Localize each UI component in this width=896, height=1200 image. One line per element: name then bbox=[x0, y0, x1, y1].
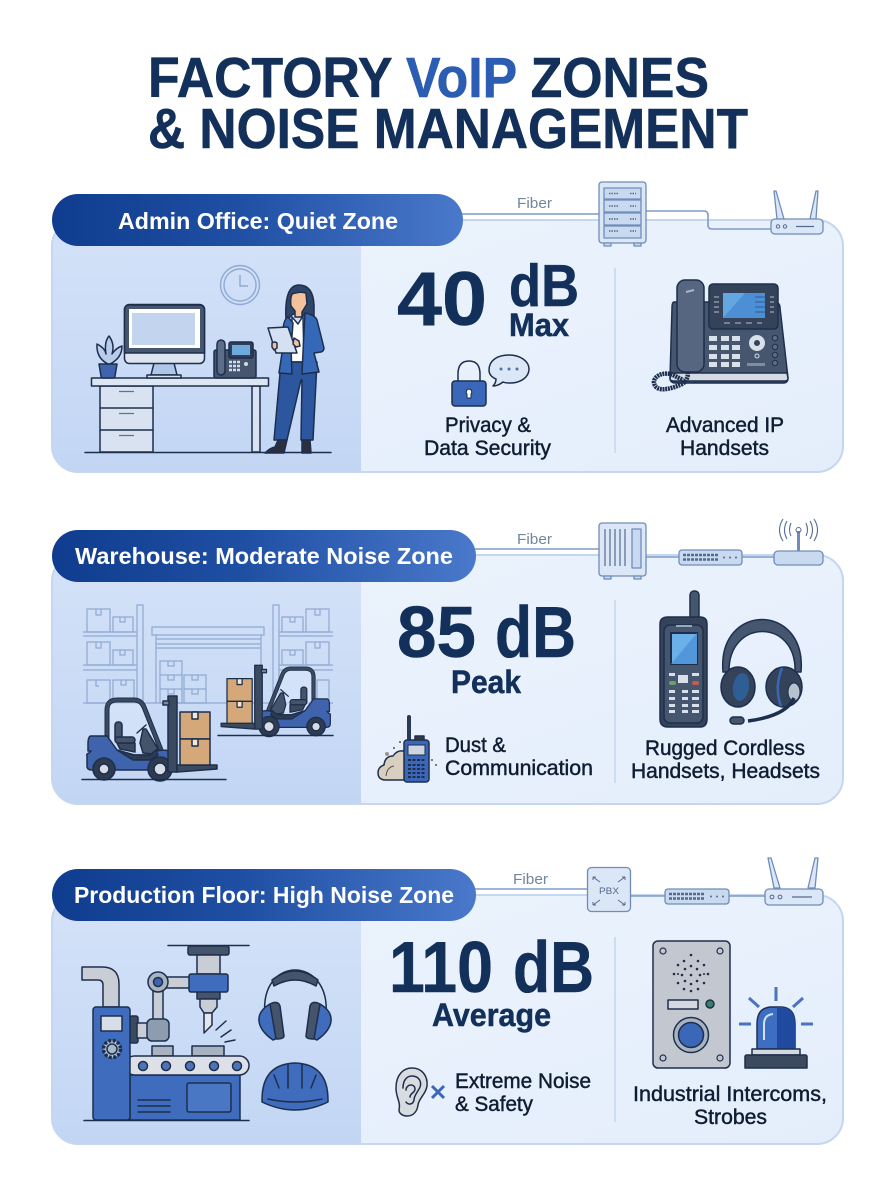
illustration: office desk and woman bbox=[85, 266, 331, 453]
header pill bbox=[52, 869, 476, 921]
plant bbox=[97, 336, 122, 378]
panel background bbox=[52, 220, 843, 472]
label: rugged cordless handsets, headsets bbox=[631, 737, 820, 783]
header pill: Admin Office: Quiet Zone bbox=[118, 208, 398, 234]
woman bbox=[265, 285, 324, 453]
pipe bbox=[82, 967, 119, 1007]
label: dust and communication bbox=[445, 734, 593, 780]
conveyor and base bbox=[125, 1046, 249, 1120]
label: dust and communication: Communication bbox=[445, 757, 593, 780]
title: & NOISE MANAGEMENT bbox=[148, 97, 748, 161]
stat: 40 dB max: dB bbox=[509, 253, 579, 319]
stat: 85 dB peak: Peak bbox=[451, 664, 521, 700]
label: rugged cordless handsets, headsets: Handsets, Headsets bbox=[631, 760, 820, 783]
label: rugged cordless handsets, headsets: Rugged Cordless bbox=[645, 737, 805, 760]
network: fiber line, server and router bbox=[460, 182, 823, 246]
label: industrial intercoms, strobes: Strobes bbox=[694, 1106, 767, 1129]
warehouse shelving and door bbox=[83, 605, 333, 703]
network: fiber line, server, switch and access point: Fiber bbox=[517, 531, 552, 548]
label: extreme noise and safety bbox=[455, 1070, 591, 1116]
panel background bbox=[52, 895, 843, 1144]
control cabinet bbox=[93, 1007, 130, 1120]
stat: 40 dB max: Max bbox=[509, 307, 569, 343]
label: extreme noise and safety: Extreme Noise bbox=[455, 1070, 591, 1093]
network: fiber line, server and router: Fiber bbox=[517, 195, 552, 212]
illustration: factory machine bbox=[82, 946, 331, 1120]
stat: 40 dB max bbox=[397, 253, 579, 343]
stat: 110 dB average: 110 bbox=[389, 928, 493, 1008]
label: privacy and data security: Privacy & bbox=[445, 414, 531, 437]
icon: wall clock bbox=[220, 266, 260, 304]
network: fiber line, PBX, switch and router: PBX bbox=[599, 886, 620, 897]
stat: 110 dB average bbox=[389, 928, 594, 1033]
title: FACTORY VoIP ZONES bbox=[148, 46, 709, 110]
icon: ear defenders bbox=[259, 970, 331, 1040]
header pill: Warehouse: Moderate Noise Zone bbox=[75, 543, 453, 569]
label: privacy and data security: Data Security bbox=[424, 437, 551, 460]
illustration: warehouse with forklifts bbox=[82, 605, 333, 781]
label: advanced IP handsets: Advanced IP bbox=[666, 414, 784, 437]
label: industrial intercoms, strobes: Industrial Intercoms, bbox=[633, 1083, 827, 1106]
label: dust and communication: Dust & bbox=[445, 734, 506, 757]
panel: production floor bbox=[52, 858, 843, 1144]
label: advanced IP handsets: Handsets bbox=[680, 437, 769, 460]
stat: 40 dB max: 40 bbox=[397, 257, 487, 342]
icon: padlock and speech bubble bbox=[452, 355, 529, 406]
forklift: front bbox=[82, 696, 226, 781]
icon: industrial intercom bbox=[653, 941, 730, 1068]
label: industrial intercoms, strobes bbox=[633, 1083, 827, 1129]
stat: 85 dB peak: 85 bbox=[397, 593, 476, 673]
stat: 110 dB average: Average bbox=[432, 997, 551, 1033]
forklift: rear bbox=[218, 665, 333, 737]
label: extreme noise and safety: & Safety bbox=[455, 1093, 533, 1116]
label: privacy and data security bbox=[424, 414, 551, 460]
network: fiber line, PBX, switch and router: Fiber bbox=[513, 871, 548, 888]
stat: 85 dB peak: dB bbox=[495, 593, 576, 673]
header pill bbox=[52, 530, 476, 582]
icon: ear with cross bbox=[396, 1068, 444, 1116]
monitor bbox=[124, 304, 204, 378]
icon: hard hat bbox=[262, 1063, 328, 1110]
stat: 110 dB average: dB bbox=[513, 928, 594, 1008]
icon: blue strobe bbox=[739, 987, 813, 1068]
desk bbox=[85, 378, 331, 452]
spindle and tool bbox=[168, 946, 249, 1042]
desk phone bbox=[214, 340, 256, 378]
panel: warehouse bbox=[52, 519, 843, 804]
stat: 85 dB peak bbox=[397, 593, 576, 700]
label: advanced IP handsets bbox=[666, 414, 784, 460]
icon: dust and radio bbox=[378, 715, 437, 782]
icon: advanced IP handset bbox=[654, 280, 788, 389]
robot arm bbox=[130, 972, 190, 1043]
title bbox=[148, 46, 748, 161]
panel: admin office bbox=[52, 182, 843, 472]
icon: headset bbox=[721, 620, 802, 724]
network: fiber line, PBX, switch and router bbox=[470, 858, 823, 912]
network: fiber line, server, switch and access point bbox=[470, 519, 823, 579]
icon: rugged cordless handset bbox=[660, 591, 707, 727]
panel background bbox=[52, 555, 843, 804]
header pill bbox=[52, 194, 463, 246]
header pill: Production Floor: High Noise Zone bbox=[74, 882, 454, 908]
